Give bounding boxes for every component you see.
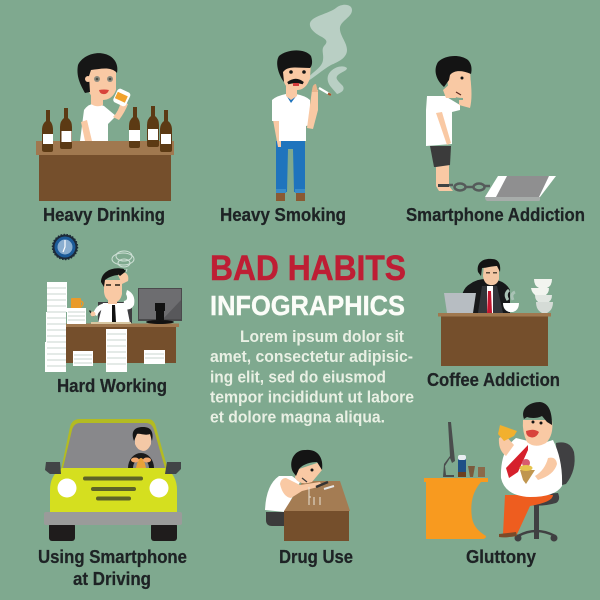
mug xyxy=(71,298,83,309)
illustration: man at table xyxy=(265,450,350,541)
body text: amet, consectetur adipisic- xyxy=(210,347,413,366)
paper stacks xyxy=(45,282,165,372)
panel: drug use xyxy=(265,450,353,567)
panel: coffee addiction xyxy=(427,259,560,390)
label: smartphone addiction: Smartphone Addiction xyxy=(406,204,585,225)
label: using smartphone at driving: Using Smartphone xyxy=(38,546,187,567)
panel: hard working xyxy=(45,234,182,396)
driver xyxy=(128,427,154,468)
label: coffee addiction: Coffee Addiction xyxy=(427,369,560,390)
label: gluttony: Gluttony xyxy=(466,546,537,567)
title: bad habits: BAD HABITS xyxy=(210,249,406,288)
illustration: man drinking xyxy=(77,53,131,141)
monitor xyxy=(138,288,182,324)
label: hard working: Hard Working xyxy=(57,375,167,396)
desk xyxy=(424,478,488,539)
desk xyxy=(438,313,551,366)
body text: Lorem ipsum dolor sit xyxy=(240,327,404,346)
panel: using smartphone at driving xyxy=(38,419,187,589)
panel: heavy smoking xyxy=(220,5,352,225)
icon: stress scribble xyxy=(112,251,134,272)
drinks xyxy=(458,455,485,477)
panel: heavy drinking xyxy=(36,53,174,225)
smoke xyxy=(306,5,352,94)
bottles xyxy=(42,106,172,152)
illustration: overworked man xyxy=(89,268,134,324)
table xyxy=(36,141,174,201)
laptop xyxy=(444,293,476,313)
panel: gluttony xyxy=(424,402,575,567)
illustration: car xyxy=(44,419,182,541)
title: infographics: INFOGRAPHICS xyxy=(210,290,405,321)
body text: et dolore magna aliqua. xyxy=(210,408,385,426)
body text: ing elit, sed do eiusmod xyxy=(210,368,386,386)
icon: clock xyxy=(52,234,78,260)
body text xyxy=(210,327,414,426)
smartphone xyxy=(485,176,556,201)
illustration: man chained to phone xyxy=(426,56,556,201)
stacked cups xyxy=(531,279,553,313)
desk xyxy=(66,324,179,363)
body text: tempor incididunt ut labore xyxy=(210,388,414,406)
label: using smartphone at driving xyxy=(38,546,187,589)
label: using smartphone at driving: at Driving xyxy=(73,568,151,589)
chain xyxy=(449,184,490,190)
monitor xyxy=(443,422,455,477)
label: heavy drinking: Heavy Drinking xyxy=(43,204,165,225)
coffee cup xyxy=(503,290,519,312)
panel: smartphone addiction xyxy=(406,56,585,225)
illustration: man eating xyxy=(498,402,562,537)
illustration: tired man in suit xyxy=(461,259,510,313)
chair xyxy=(514,442,575,542)
label: drug use: Drug Use xyxy=(279,546,353,567)
panel: title xyxy=(210,249,414,426)
label: heavy smoking: Heavy Smoking xyxy=(220,204,346,225)
illustration: man smoking xyxy=(272,50,331,201)
